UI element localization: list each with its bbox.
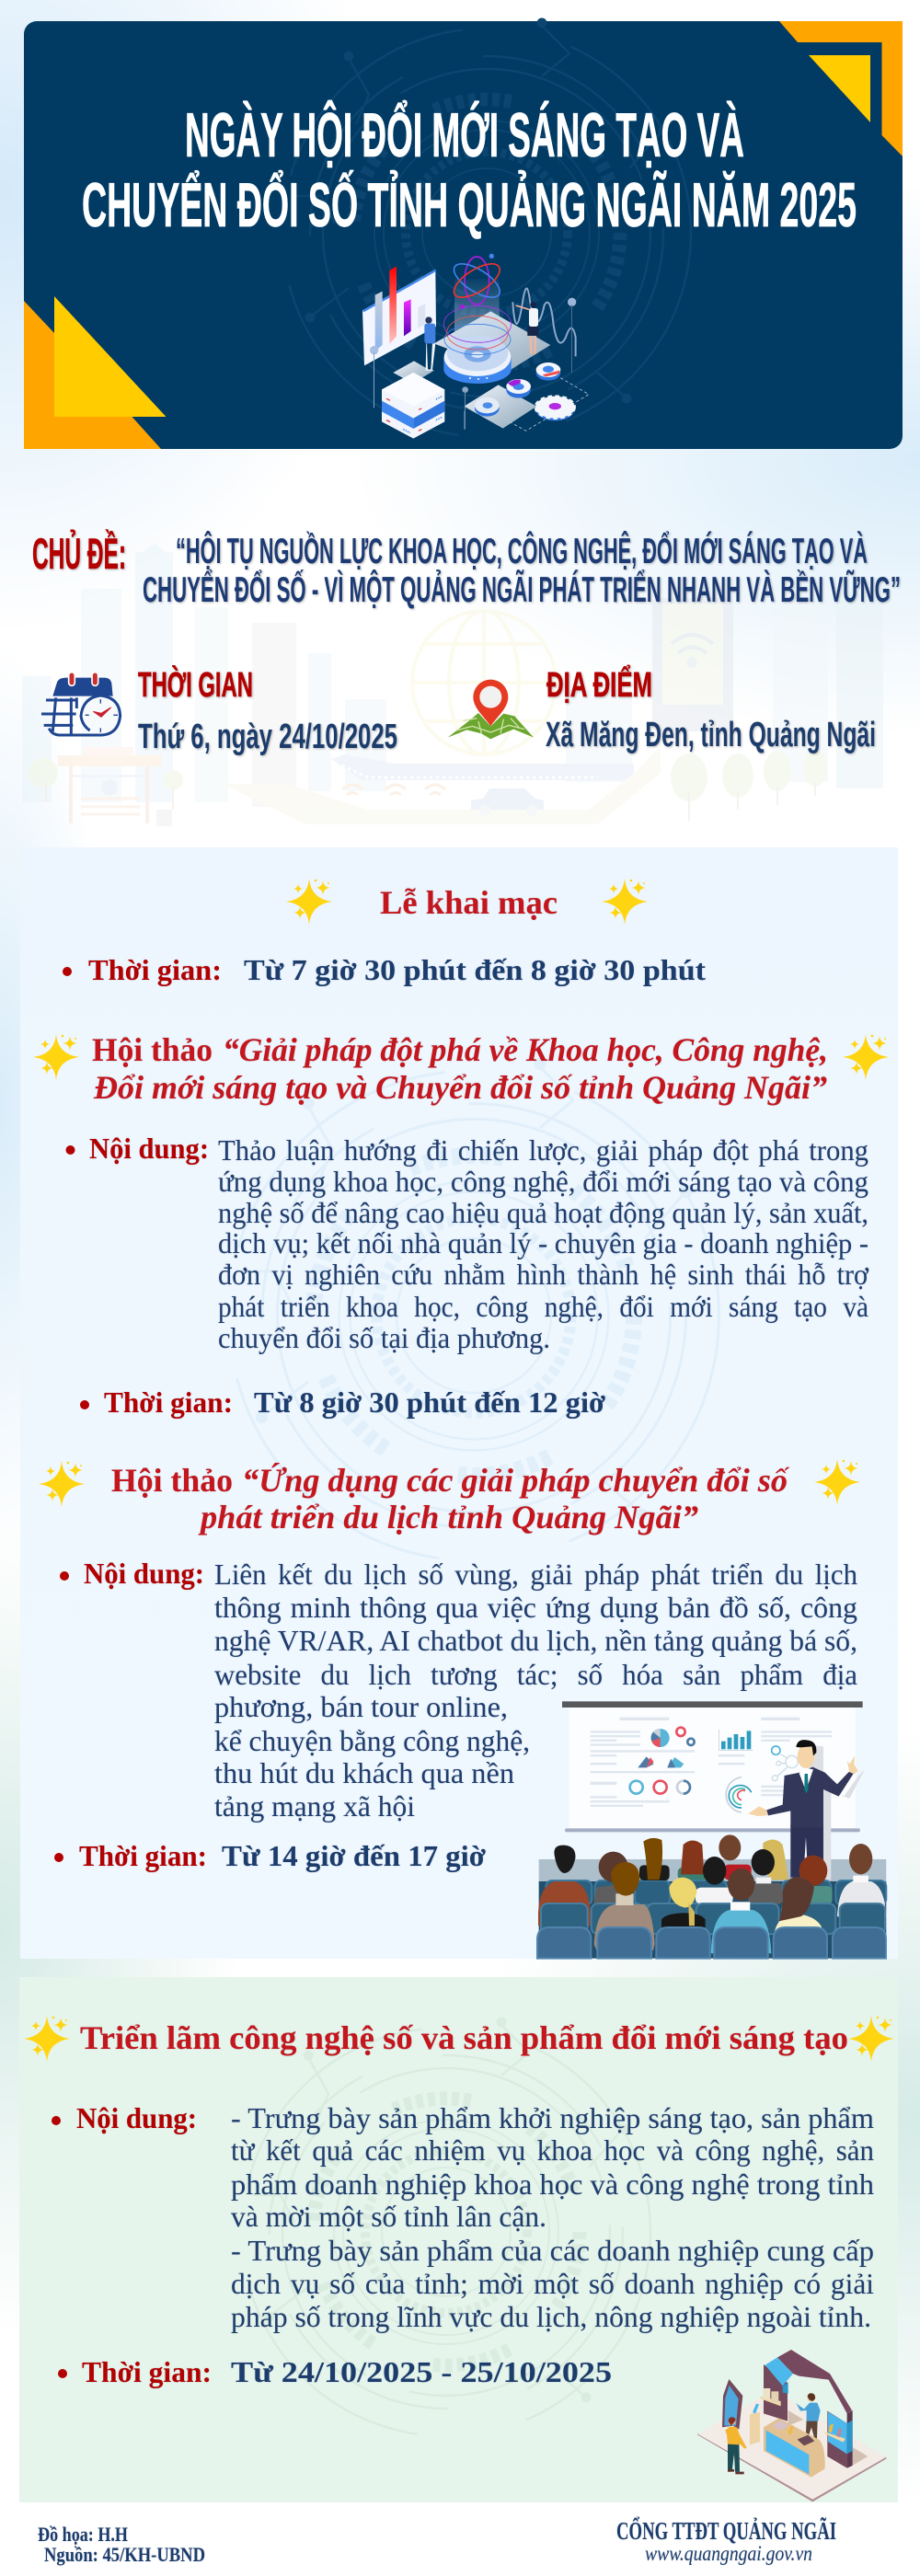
bullet bbox=[54, 1853, 63, 1862]
footer: credits: Nguồn: 45/KH-UBND bbox=[44, 2543, 205, 2566]
panel: opening ceremony and workshops bbox=[20, 847, 898, 1959]
man at board bbox=[424, 316, 435, 371]
time value: Từ 8 giờ 30 phút đến 12 giờ bbox=[254, 1386, 605, 1419]
reception counter bbox=[764, 2418, 825, 2478]
footer: publisher bbox=[616, 2516, 836, 2565]
time block bbox=[41, 664, 397, 756]
content text: đơn vị nghiên cứu nhằm hình thành hệ sinh thái hỗ trợ bbox=[218, 1258, 869, 1291]
footer: credits: Đồ họa: H.H bbox=[38, 2523, 128, 2546]
time heading: THỜI GIAN bbox=[138, 664, 253, 705]
seats middle row bbox=[541, 1903, 885, 1934]
time value: Từ 14 giờ đến 17 giờ bbox=[222, 1839, 486, 1872]
time label: Thời gian: bbox=[88, 953, 222, 986]
content text: nghệ VR/AR, AI chatbot du lịch, nền tảng quảng bá số, bbox=[214, 1624, 857, 1657]
bullet bbox=[52, 2116, 61, 2125]
gear bbox=[535, 397, 575, 420]
atom bbox=[449, 257, 505, 305]
bullet bbox=[80, 1400, 89, 1409]
content text: dịch vụ; kết nối nhà quản lý - chuyên gia - doanh nghiệp - bbox=[218, 1226, 868, 1259]
time label: Thời gian: bbox=[104, 1386, 233, 1419]
icon: sparkle bbox=[814, 1459, 860, 1505]
workshop two heading: Hội thảo bbox=[111, 1462, 233, 1499]
content text: thu hút du khách qua nền bbox=[214, 1756, 514, 1789]
content text: chuyển đổi số tại địa phương. bbox=[218, 1321, 550, 1354]
panel: technology exhibition bbox=[19, 1977, 898, 2502]
workshop one heading: Hội thảo bbox=[92, 1031, 213, 1068]
content text: Liên kết du lịch số vùng, giải pháp phát triển du lịch bbox=[214, 1558, 857, 1591]
content text: tảng mạng xã hội bbox=[214, 1789, 415, 1823]
time value: Thứ 6, ngày 24/10/2025 bbox=[138, 718, 397, 756]
icon: map pin bbox=[448, 680, 534, 739]
workshop two heading: phát triển du lịch tỉnh Quảng Ngãi” bbox=[198, 1499, 698, 1535]
exhibition heading: Triển lãm công nghệ số và sản phẩm đổi mới sáng tạo bbox=[80, 2019, 848, 2056]
header banner bbox=[24, 18, 903, 449]
arch bbox=[764, 2350, 853, 2468]
seat rows bbox=[539, 1880, 886, 1959]
content text: - Trưng bày sản phẩm khởi nghiệp sáng tạo, sản phẩm bbox=[231, 2101, 874, 2134]
content text: kể chuyện bằng công nghệ, bbox=[214, 1724, 530, 1757]
woman pointing bbox=[516, 302, 538, 354]
presenter bbox=[748, 1740, 865, 1880]
circuit watermark bbox=[242, 2018, 650, 2436]
content text: và mời một số tỉnh lân cận. bbox=[231, 2200, 546, 2233]
right shelf bbox=[825, 2424, 845, 2443]
content text: từ kết quả các nhiệm vụ khoa học và công nghệ, sản bbox=[231, 2133, 874, 2167]
bullet bbox=[66, 1145, 75, 1155]
theme block bbox=[32, 529, 901, 610]
audience front row bbox=[594, 1862, 822, 1953]
workshop one heading: “Giải pháp đột phá về Khoa học, Công nghệ, bbox=[223, 1031, 828, 1068]
content text bbox=[231, 2101, 874, 2333]
illustration: presenter and audience bbox=[537, 1701, 886, 1959]
icon: calendar and clock bbox=[41, 673, 121, 735]
title bbox=[82, 99, 857, 240]
time label: Thời gian: bbox=[82, 2355, 212, 2388]
content text: - Trưng bày sản phẩm của các doanh nghiệp cung cấp bbox=[231, 2234, 874, 2267]
wall bbox=[539, 1859, 886, 1884]
time value: Từ 7 giờ 30 phút đến 8 giờ 30 phút bbox=[244, 953, 706, 986]
content text: phương, bán tour online, bbox=[214, 1690, 508, 1723]
small platform and donuts bbox=[462, 362, 589, 431]
staff member bbox=[796, 2393, 821, 2439]
content text: Thảo luận hướng đi chiến lược, giải pháp đột phá trong bbox=[218, 1133, 868, 1167]
footer: credits bbox=[38, 2523, 205, 2566]
content text: dịch vụ số của tỉnh; mời một số doanh nghiệp có giải bbox=[231, 2267, 874, 2300]
content text bbox=[218, 1133, 869, 1354]
content label: Nội dung: bbox=[84, 1557, 204, 1590]
audience back row bbox=[538, 1834, 886, 1926]
icon: sparkle bbox=[602, 879, 648, 925]
booth floor bbox=[697, 2390, 886, 2501]
content label: Nội dung: bbox=[89, 1132, 209, 1165]
server bbox=[382, 373, 444, 439]
decoration: bottom left corner bbox=[24, 296, 166, 449]
visitor bbox=[725, 2417, 747, 2474]
cylinder bbox=[443, 336, 512, 384]
bullet bbox=[60, 1571, 69, 1581]
platform bbox=[434, 311, 550, 372]
workshop two heading: “Ứng dụng các giải pháp chuyển đổi số bbox=[242, 1462, 790, 1499]
content text: phẩm doanh nghiệp khoa học và công nghệ trong tỉnh bbox=[231, 2168, 874, 2201]
city skyline backdrop bbox=[22, 543, 883, 826]
circuit watermark bbox=[282, 18, 691, 437]
content text: pháp số trong lĩnh vực du lịch, nông nghiệp ngoài tỉnh. bbox=[231, 2300, 871, 2333]
banner bbox=[722, 2379, 742, 2430]
wave line bbox=[512, 288, 576, 356]
seats front row bbox=[537, 1927, 886, 1959]
left shelf bbox=[761, 2388, 781, 2406]
content text bbox=[214, 1558, 857, 1823]
content text: nghệ số để nâng cao hiệu quả hoạt động quản lý, sản xuất, bbox=[218, 1196, 868, 1229]
icon: sparkle bbox=[286, 879, 332, 925]
workshop one heading bbox=[92, 1031, 828, 1106]
chart board bbox=[362, 266, 436, 408]
rings bbox=[443, 305, 512, 355]
projection screen bbox=[562, 1701, 863, 1832]
workshop two heading bbox=[111, 1462, 790, 1535]
footer: publisher: www.quangngai.gov.vn bbox=[645, 2542, 812, 2565]
workshop one heading: Đổi mới sáng tạo và Chuyển đổi số tỉnh Quảng Ngãi” bbox=[93, 1069, 827, 1106]
icon: sparkle bbox=[843, 1034, 889, 1080]
icon: sparkle bbox=[848, 2016, 894, 2062]
bullet bbox=[63, 967, 72, 976]
illustration: exhibition booth bbox=[697, 2350, 886, 2501]
section: workshop one bbox=[33, 1031, 889, 1419]
heading: opening ceremony: Lễ khai mạc bbox=[380, 884, 558, 921]
content text: ứng dụng khoa học, công nghệ, đổi mới sáng tạo và công bbox=[218, 1165, 868, 1198]
location block bbox=[448, 663, 876, 754]
decoration: top right corner bbox=[779, 21, 903, 156]
theme label: CHỦ ĐỀ: bbox=[32, 529, 126, 578]
icon: sparkle bbox=[33, 1034, 79, 1080]
section: workshop two bbox=[39, 1459, 886, 1959]
circuit watermark bbox=[229, 1058, 719, 1560]
icon: sparkle bbox=[24, 2016, 70, 2062]
section: opening ceremony bbox=[63, 879, 706, 986]
bullet bbox=[58, 2369, 67, 2378]
content label: Nội dung: bbox=[76, 2101, 197, 2134]
content text: thông minh thông qua việc ứng dụng bản đồ số, công bbox=[214, 1591, 857, 1624]
time value: Từ 24/10/2025 - 25/10/2025 bbox=[231, 2355, 612, 2388]
display pedestal bbox=[750, 2404, 760, 2444]
beam bbox=[454, 279, 500, 340]
content text: website du lịch tương tác; số hóa sản phẩm địa bbox=[214, 1658, 857, 1691]
time label: Thời gian: bbox=[79, 1839, 207, 1872]
icon: sparkle bbox=[39, 1461, 85, 1507]
content text: phát triển khoa học, công nghệ, đổi mới sáng tạo và bbox=[218, 1290, 868, 1323]
theme text bbox=[143, 530, 901, 610]
location heading: ĐỊA ĐIỂM bbox=[546, 663, 652, 705]
illustration: isometric technology scene bbox=[362, 254, 589, 439]
